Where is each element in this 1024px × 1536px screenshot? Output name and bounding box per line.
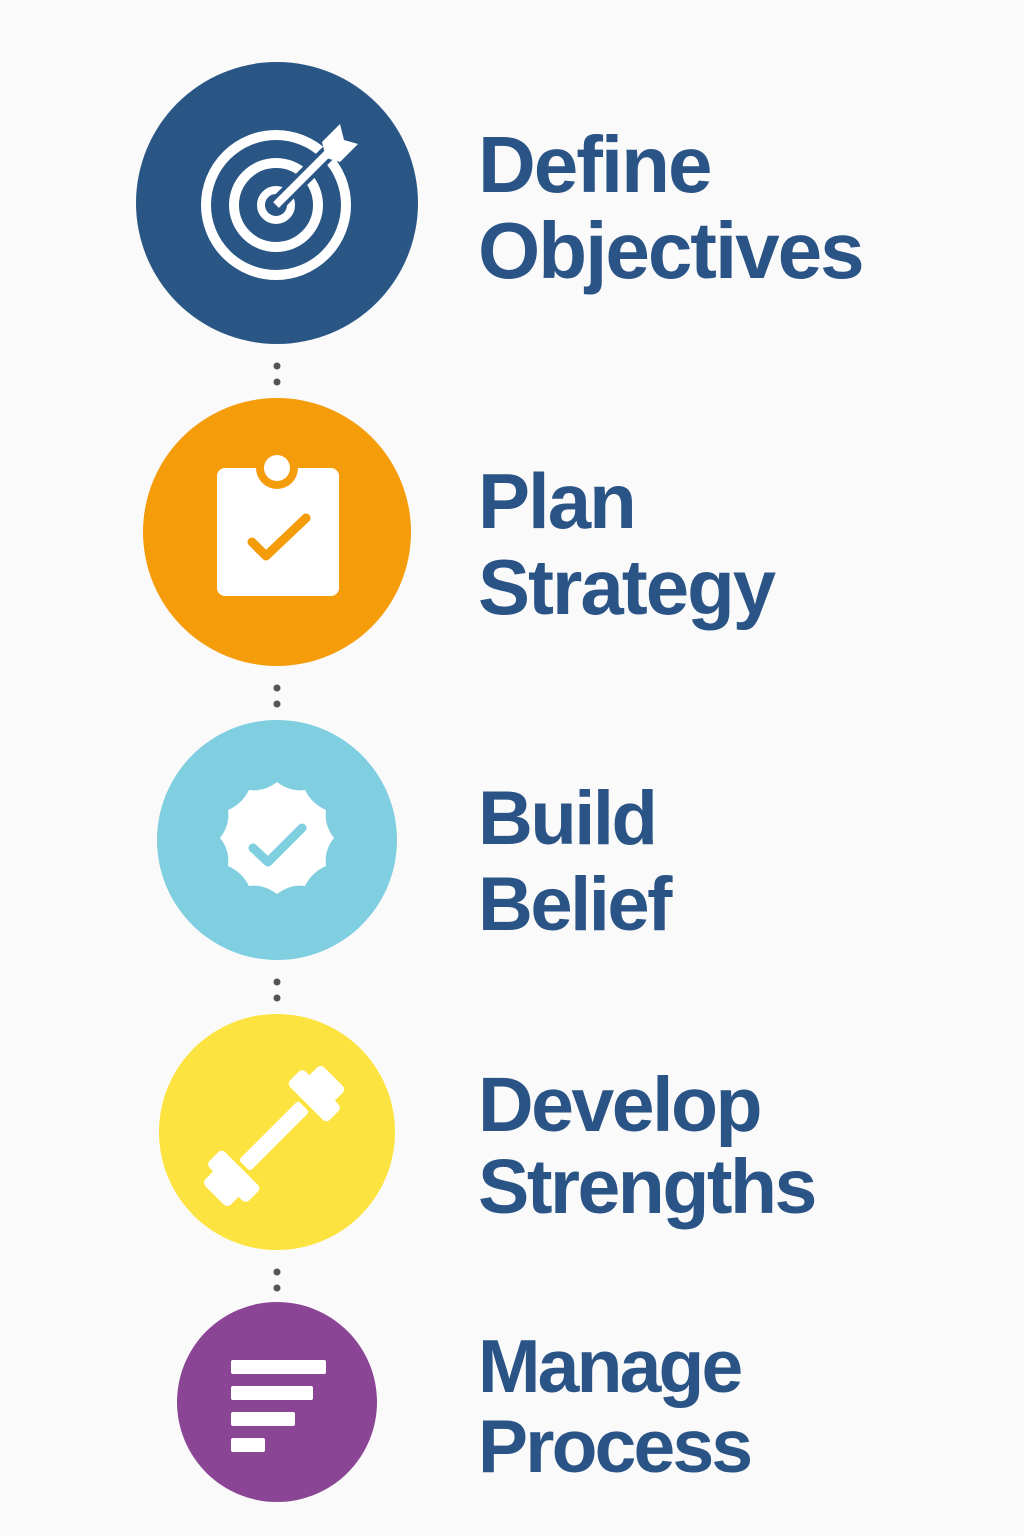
connector dots xyxy=(274,362,280,1292)
heading: Manage Process xyxy=(478,1324,750,1488)
heading: Define Objectives xyxy=(478,120,863,295)
heading: Plan Strategy: Plan xyxy=(478,457,635,545)
heading: Develop Strengths: Develop xyxy=(478,1062,760,1148)
heading: Build Belief xyxy=(478,776,673,947)
icon: clipboard circle xyxy=(143,398,411,666)
heading: Define Objectives: Objectives xyxy=(478,206,863,295)
heading: Manage Process: Manage xyxy=(478,1324,740,1408)
icon: dumbbell circle xyxy=(159,1014,395,1250)
icon: list circle xyxy=(177,1302,377,1502)
heading: Develop Strengths: Strengths xyxy=(478,1144,815,1230)
heading: Plan Strategy: Strategy xyxy=(478,543,774,631)
heading: Build Belief: Belief xyxy=(478,862,670,947)
heading: Plan Strategy xyxy=(478,457,776,631)
icon: target circle xyxy=(136,62,418,344)
heading: Develop Strengths xyxy=(478,1062,815,1230)
heading: Manage Process: Process xyxy=(478,1404,750,1488)
heading: Build Belief: Build xyxy=(478,776,655,861)
heading: Define Objectives: Define xyxy=(478,120,710,209)
icon: badge circle xyxy=(157,720,397,960)
